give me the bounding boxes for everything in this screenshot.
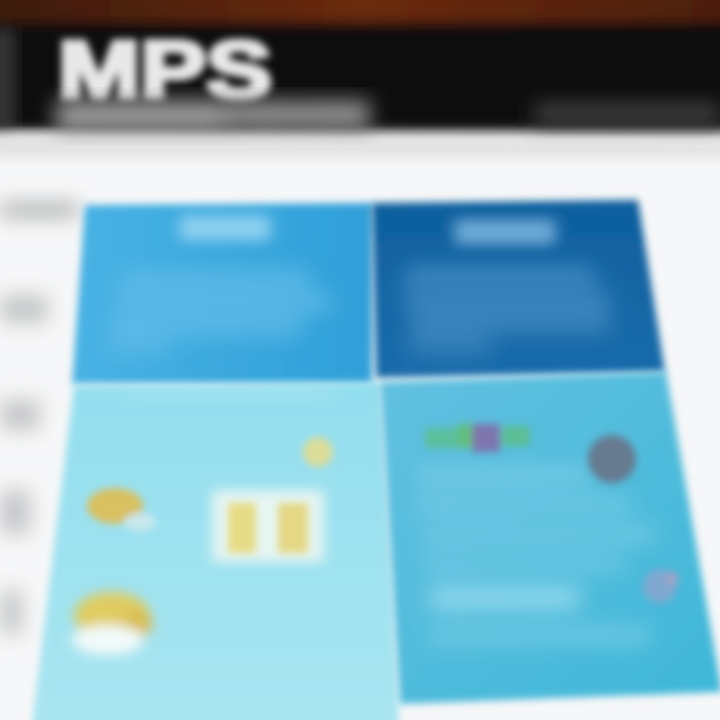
title: MPS — [58, 25, 272, 116]
icon: yellow documents on white card — [212, 490, 324, 562]
heading: top right — [455, 220, 555, 244]
subtitle: Overview Guide — [60, 104, 360, 129]
icon: dark gear — [588, 435, 636, 483]
icon: sun and cloud — [72, 592, 152, 655]
paper top edge — [0, 134, 720, 158]
text block: bottom right — [420, 468, 655, 642]
subtitle — [56, 100, 720, 132]
panel: bottom right cyan — [380, 372, 720, 704]
panel: top right dark blue — [372, 200, 665, 378]
dark header band — [0, 0, 720, 135]
heading: top left — [180, 216, 270, 240]
icon: yellow cloud — [87, 488, 156, 531]
icon: document bars — [228, 503, 308, 553]
panel: top left blue — [72, 203, 372, 384]
icon: small lilac mark — [643, 569, 678, 603]
icon: yellow dot top — [303, 437, 333, 467]
text block: top left — [108, 272, 330, 352]
left margin text — [0, 203, 78, 634]
panel: bottom left light cyan — [30, 382, 400, 720]
icon: colored chips row — [425, 424, 530, 452]
text block: top right — [405, 268, 610, 350]
